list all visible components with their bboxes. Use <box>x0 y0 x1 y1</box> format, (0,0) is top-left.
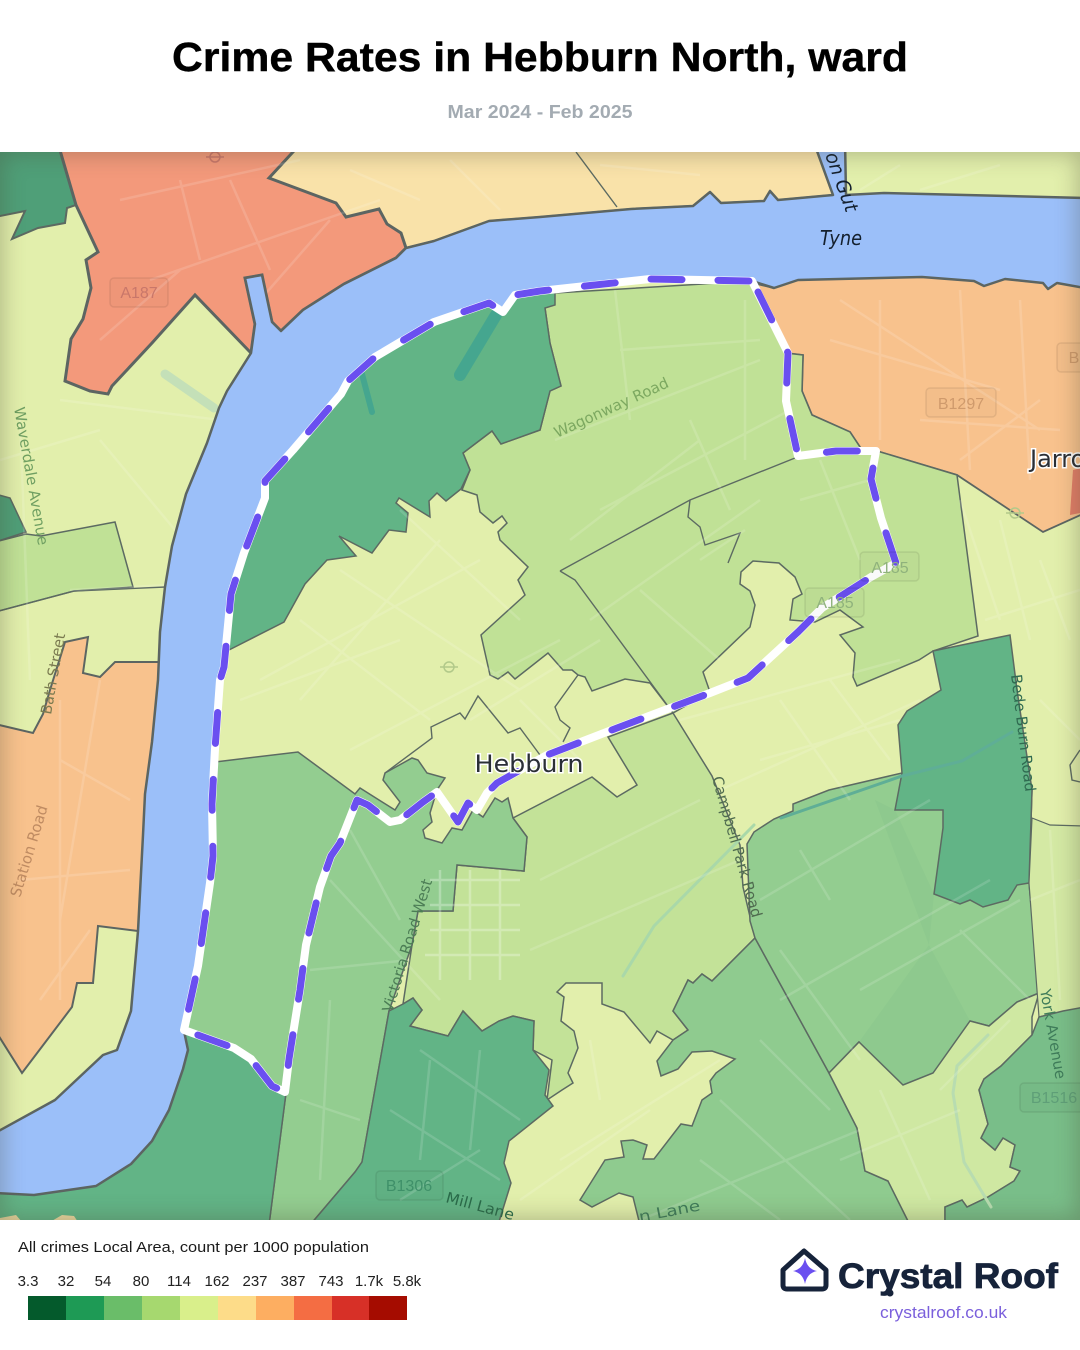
road shield labels: B1297 <box>938 396 984 413</box>
area: mid green south centre <box>580 938 910 1225</box>
area: mid green east <box>747 773 1039 1085</box>
street name labels <box>7 374 1070 1226</box>
road shield labels: B <box>1069 350 1079 367</box>
legend tick labels: 237 <box>242 1273 268 1290</box>
area: red east edge <box>1070 467 1080 515</box>
river Tyne <box>0 140 1080 1195</box>
legend colour scale <box>28 1296 407 1320</box>
legend tick labels: 743 <box>318 1273 344 1290</box>
area: dark green west edge <box>0 494 26 542</box>
street grid south of Hebburn <box>425 870 520 980</box>
area: cream north bank <box>272 152 832 246</box>
area: red north-west <box>57 140 406 394</box>
water channels <box>165 315 1012 1207</box>
area: light green west band <box>0 522 133 612</box>
logo wordmark: Crystal Roof <box>838 1257 1058 1296</box>
label: Hebburn: Hebburn <box>474 750 584 778</box>
logo url: crystalroof.co.uk <box>880 1304 1008 1322</box>
logo: Crystal Roof <box>783 1251 1058 1322</box>
legend title: All crimes Local Area, count per 1000 population <box>18 1239 369 1256</box>
street name labels: Campbell Park Road <box>708 774 766 919</box>
road shield labels: A187 <box>120 285 158 302</box>
street name labels: Wagonway Road <box>551 374 671 442</box>
street name labels: Mill Lane <box>444 1188 516 1224</box>
area: dark green south-west <box>0 1031 286 1225</box>
label: Jarrow Gut: on Gut <box>820 149 863 216</box>
area: dark green north of ward <box>224 291 561 651</box>
road shields <box>110 278 1080 1200</box>
pale pocket lines <box>0 152 1080 782</box>
legend <box>18 1239 422 1320</box>
legend tick labels: 5.8k <box>393 1273 422 1290</box>
legend tick labels: 162 <box>204 1273 230 1290</box>
road shield labels: A185 <box>816 595 854 612</box>
road shield labels: A185 <box>871 560 909 577</box>
legend tick labels: 1.7k <box>355 1273 384 1290</box>
area: dark green B1306 <box>310 998 553 1225</box>
area: tan scraps at south-west edge <box>0 1215 76 1220</box>
ward boundary: Hebburn North <box>184 279 896 1092</box>
area: pale green east strip <box>1029 818 1080 1017</box>
area: dark green Bede Burn <box>895 635 1032 907</box>
legend tick labels: 387 <box>280 1273 306 1290</box>
area: slightly darker patch east <box>860 1020 970 1084</box>
street name labels: n Lane <box>637 1196 702 1226</box>
road shield labels: B1516 <box>1031 1090 1077 1107</box>
map edge shading <box>0 152 1080 1220</box>
area: light green south-east <box>829 993 1039 1225</box>
street name labels: Bath Street <box>37 632 69 716</box>
road shield labels <box>120 285 1079 1195</box>
street name labels: Waverdale Avenue <box>10 406 52 547</box>
area: orange west <box>0 637 165 1073</box>
area: orange east <box>757 277 1080 532</box>
legend tick labels: 3.3 <box>18 1273 38 1290</box>
street name labels: Station Road <box>7 803 52 899</box>
road shield labels: B1306 <box>386 1178 432 1195</box>
station symbols <box>206 152 1024 672</box>
label: Tyne: Tyne <box>820 226 862 250</box>
title: Crime Rates in Hebburn North, ward <box>172 34 908 80</box>
area: mid-dark green south-east corner <box>945 1007 1080 1225</box>
legend tick labels: 54 <box>95 1273 111 1290</box>
legend tick labels: 80 <box>133 1273 149 1290</box>
legend tick labels: 114 <box>167 1273 191 1290</box>
area: mid green west of Victoria Road <box>184 752 527 1225</box>
area: dark green north-west <box>0 152 75 241</box>
street name labels: York Avenue <box>1036 987 1070 1080</box>
street name labels: Bede Burn Road <box>1007 673 1039 793</box>
street name labels: Victoria Road West <box>379 877 436 1014</box>
subtitle: date range: Mar 2024 - Feb 2025 <box>448 102 632 122</box>
logo y key detail <box>886 1290 894 1296</box>
streets <box>0 160 1080 1220</box>
area: light green south of Hebburn <box>403 713 755 1100</box>
area: light green north of Hebburn <box>462 281 978 713</box>
legend tick labels: 32 <box>58 1273 74 1290</box>
legend tick labels <box>18 1273 422 1290</box>
icon: house with star <box>783 1251 826 1289</box>
